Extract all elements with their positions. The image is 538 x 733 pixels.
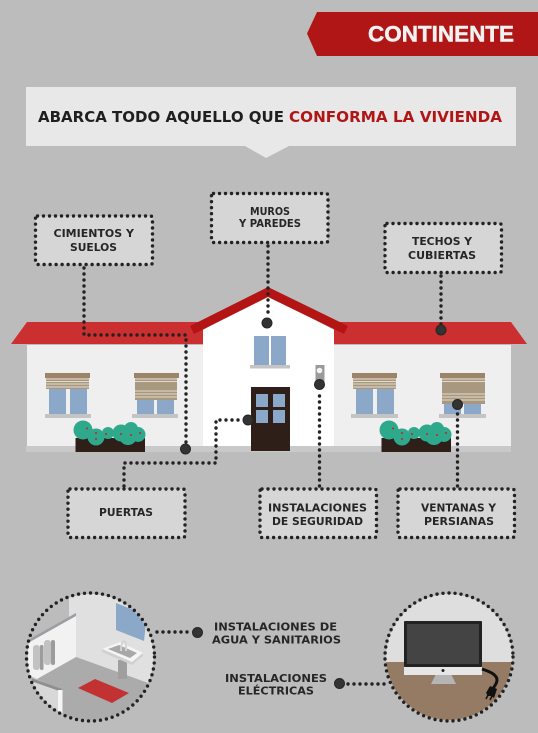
central wall <box>203 295 334 446</box>
window 4 <box>439 373 486 418</box>
box: techos y cubiertas: CUBIERTAS <box>408 250 476 262</box>
circle: computer illustration <box>383 591 515 723</box>
side wall <box>28 615 76 679</box>
box: instalaciones de seguridad <box>260 489 376 538</box>
washbasin <box>102 641 143 679</box>
door <box>251 387 290 451</box>
ground strip <box>26 446 511 452</box>
box: instalaciones de seguridad: INSTALACIONES <box>268 502 367 514</box>
box: techos y cubiertas <box>385 224 502 272</box>
title callout: ABARCA TODO AQUELLO QUE <box>38 108 284 126</box>
ribbon: Continente: CONTINENTE <box>368 22 514 46</box>
label: instalaciones electricas <box>225 673 327 698</box>
window 3 <box>351 373 398 418</box>
title callout: CONFORMA LA VIVIENDA <box>289 108 502 126</box>
side wall top <box>28 613 76 643</box>
right wing wall <box>334 345 511 446</box>
window 1 <box>45 373 91 418</box>
connector: instalaciones de seguridad <box>314 380 324 486</box>
connector: cimientos y suelos <box>84 268 190 454</box>
back wall <box>69 594 154 683</box>
label: instalaciones de agua y sanitarios: AGUA Y SANITARIOS <box>212 634 341 646</box>
box: muros y paredes: Y PAREDES <box>238 218 301 230</box>
box: muros y paredes: MUROS <box>250 206 290 218</box>
planter right <box>380 420 452 452</box>
box: ventanas y persianas: VENTANAS Y <box>421 502 496 514</box>
central window <box>250 336 290 368</box>
low partition <box>34 682 58 711</box>
box: muros y paredes <box>212 194 328 242</box>
box: instalaciones de seguridad: DE SEGURIDAD <box>272 516 363 528</box>
label: instalaciones electricas: INSTALACIONES <box>225 673 327 685</box>
connector: techos y cubiertas <box>436 276 446 335</box>
window 2 <box>132 373 179 418</box>
box: cimientos y suelos: CIMIENTOS Y <box>54 228 134 240</box>
box: ventanas y persianas <box>398 489 514 538</box>
connector: puertas <box>124 415 253 486</box>
planter left <box>74 420 146 452</box>
connector: agua y sanitarios <box>157 628 202 638</box>
box: ventanas y persianas: PERSIANAS <box>424 516 494 528</box>
central gable roof <box>190 287 348 334</box>
power cable and plug <box>482 669 497 700</box>
title callout <box>26 87 516 158</box>
floor <box>38 657 148 720</box>
box: puertas: PUERTAS <box>99 507 153 519</box>
box: cimientos y suelos: SUELOS <box>70 242 117 254</box>
ribbon: Continente <box>307 12 538 56</box>
left wing wall <box>27 345 203 446</box>
house <box>11 287 527 452</box>
monitor <box>404 621 482 684</box>
dotted ring <box>385 593 513 721</box>
radiator <box>33 640 55 670</box>
connector: muros y paredes <box>262 246 272 328</box>
security sensor <box>316 365 324 385</box>
connector: ventanas y persianas <box>452 400 462 486</box>
dotted ring <box>26 593 154 721</box>
box: puertas <box>68 489 185 538</box>
label: instalaciones electricas: ELÉCTRICAS <box>238 684 314 698</box>
connector: electricas <box>334 678 388 688</box>
label: instalaciones de agua y sanitarios <box>212 622 341 646</box>
left roof <box>11 322 203 344</box>
circle: bathroom illustration <box>26 590 160 730</box>
right roof <box>334 322 527 344</box>
box: techos y cubiertas: TECHOS Y <box>412 236 472 248</box>
window <box>116 603 146 641</box>
rug <box>78 679 129 703</box>
label: instalaciones de agua y sanitarios: INSTALACIONES DE <box>214 622 337 634</box>
box: cimientos y suelos <box>36 216 152 264</box>
